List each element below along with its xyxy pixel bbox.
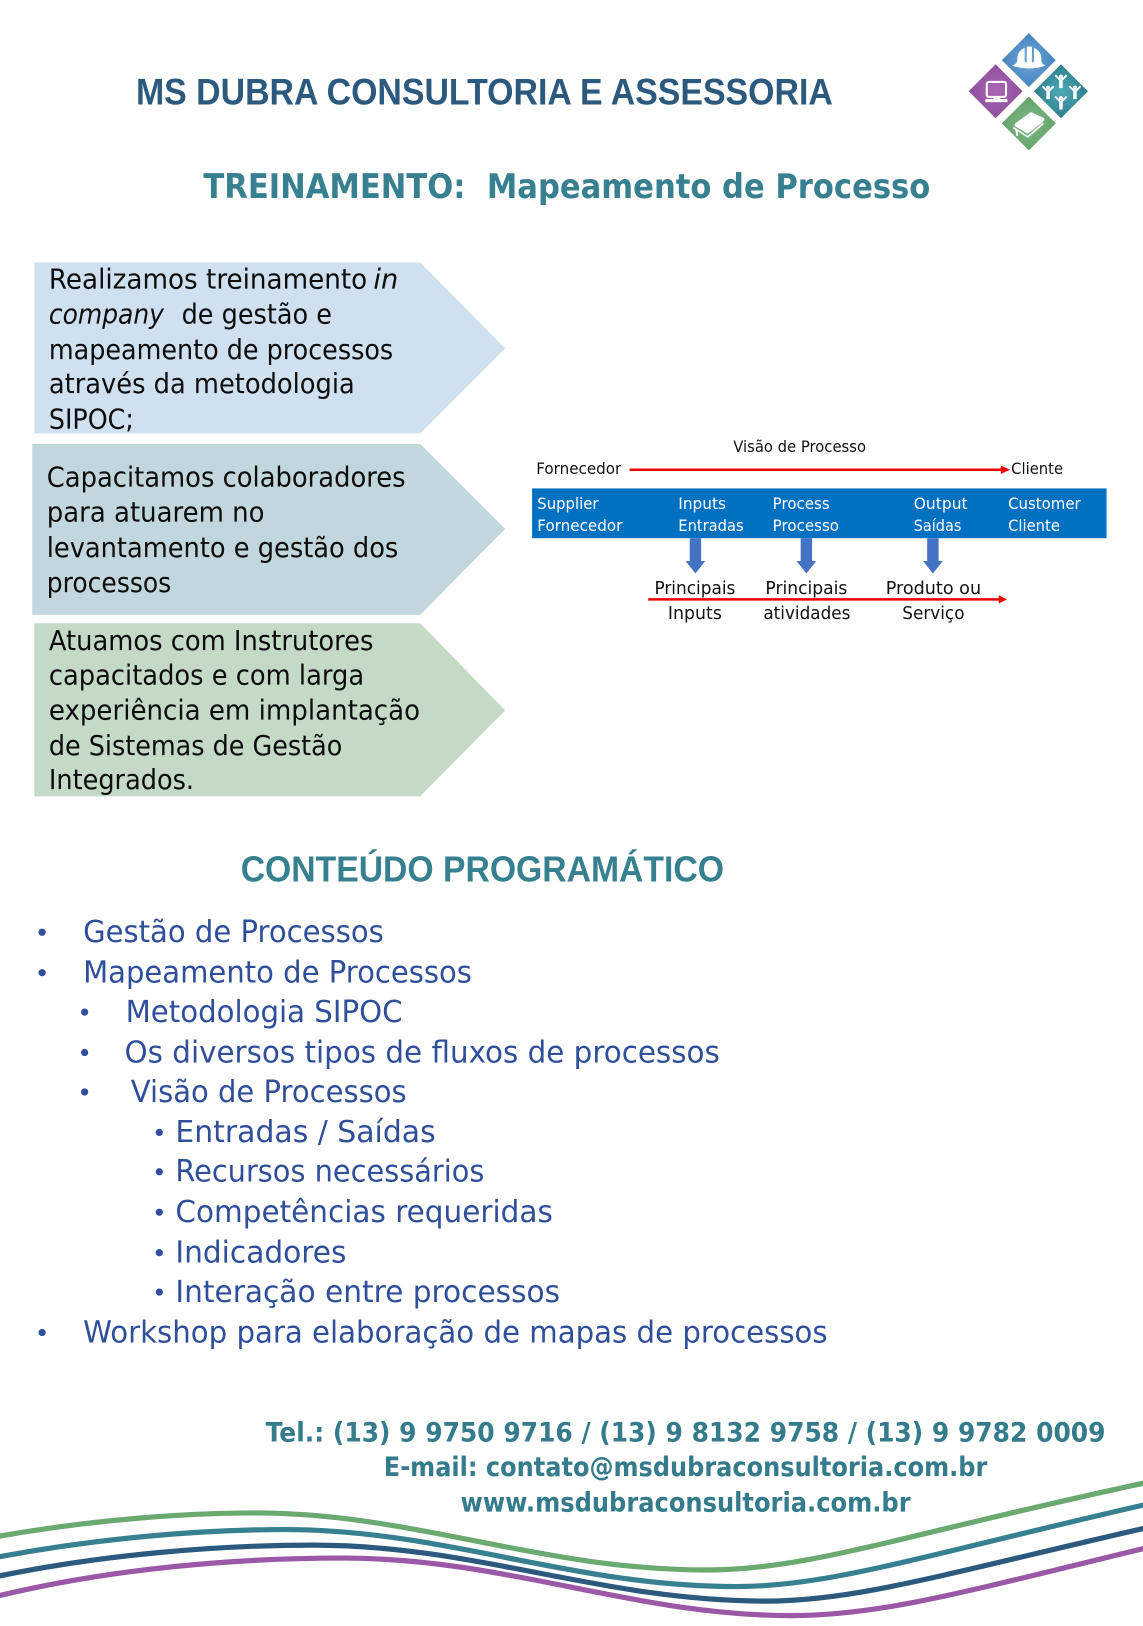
program content list: Workshop para elaboração de mapas de processos <box>83 1315 828 1350</box>
panel: in company training: SIPOC; <box>49 403 134 435</box>
panel: instructors: capacitados e com larga <box>49 659 364 691</box>
SIPOC diagram <box>532 437 1107 624</box>
label: product or service: Produto ou <box>886 579 981 599</box>
panel: in company training: mapeamento de processos <box>49 334 393 366</box>
panel: in company training: company <box>49 299 165 331</box>
label: main activities: Principais <box>765 579 847 599</box>
label: supplier: Fornecedor <box>536 459 622 478</box>
blue SIPOC bar: Inputs <box>678 494 726 513</box>
contact information <box>266 1417 1106 1518</box>
blue SIPOC bar: Output <box>914 494 968 513</box>
arrow: process view <box>630 466 1010 474</box>
blue SIPOC bar: Saídas <box>914 516 961 535</box>
blue SIPOC bar: Process <box>773 494 830 513</box>
blue SIPOC bar: Customer <box>1008 494 1081 513</box>
contact information: E-mail: contato@msdubraconsultoria.com.br <box>384 1452 988 1483</box>
panel: in company training: in <box>373 263 398 295</box>
program content list <box>38 915 828 1350</box>
blue SIPOC bar: Fornecedor <box>537 516 623 535</box>
blue SIPOC bar: Entradas <box>678 516 744 535</box>
panel: instructors: Integrados. <box>49 764 194 796</box>
label: product or service: Serviço <box>902 604 965 624</box>
diagram heading: Visão de Processo <box>733 437 866 456</box>
blue SIPOC bar <box>532 488 1107 538</box>
program content list: Entradas / Saídas <box>175 1115 436 1150</box>
subtitle: TREINAMENTO: Mapeamento de Processo <box>203 167 930 207</box>
arrow: lower process line <box>648 595 1007 604</box>
contact information: www.msdubraconsultoria.com.br <box>461 1487 911 1518</box>
panel: instructors: experiência em implantação <box>49 695 420 727</box>
panel: in company training: através da metodologia <box>49 368 355 400</box>
panel: training staff: para atuarem no <box>47 497 265 529</box>
program content list: Indicadores <box>175 1236 346 1271</box>
blue SIPOC bar: Supplier <box>537 494 599 513</box>
decorative waves <box>0 1483 1143 1616</box>
program content list: Gestão de Processos <box>83 915 384 950</box>
label: main inputs <box>654 579 735 624</box>
panel: instructors: de Sistemas de Gestão <box>49 730 342 762</box>
blue SIPOC bar: Processo <box>773 516 839 535</box>
icon: book <box>1002 96 1056 150</box>
program content list: Recursos necessários <box>175 1155 484 1190</box>
label: main activities: atividades <box>763 604 850 624</box>
panel: instructors: Atuamos com Instrutores <box>49 625 373 657</box>
program content list: Interação entre processos <box>175 1275 560 1310</box>
panel: training staff: levantamento e gestão dos <box>47 532 398 564</box>
program content list: Competências requeridas <box>175 1195 553 1230</box>
panel: training staff: Capacitamos colaboradores <box>47 461 406 493</box>
label: main inputs: Principais <box>654 579 735 599</box>
icon: computer monitor <box>969 64 1023 118</box>
program content list: Metodologia SIPOC <box>126 995 402 1030</box>
label: product or service <box>886 579 981 624</box>
icon: group of people <box>1034 64 1088 118</box>
program content list: Os diversos tipos de fluxos de processos <box>125 1035 720 1070</box>
panel: training staff <box>32 444 505 615</box>
panel: in company training: de gestão e <box>182 299 332 331</box>
blue SIPOC bar: Cliente <box>1008 516 1060 535</box>
program content list: Mapeamento de Processos <box>83 956 472 991</box>
panel: in company training: Realizamos treinamento <box>49 263 367 295</box>
icon: hard hat <box>1002 33 1056 87</box>
arrows: down to outputs <box>686 538 943 573</box>
panel: instructors <box>34 623 505 796</box>
title: MS DUBRA CONSULTORIA E ASSESSORIA <box>136 71 833 113</box>
label: client: Cliente <box>1011 459 1063 478</box>
logo <box>969 33 1088 150</box>
program content list: Visão de Processos <box>131 1075 407 1110</box>
panel: training staff: processos <box>47 567 171 599</box>
label: main inputs: Inputs <box>668 604 722 624</box>
label: main activities <box>763 579 850 624</box>
heading: program content: CONTEÚDO PROGRAMÁTICO <box>241 847 724 889</box>
panel: in company training <box>34 262 505 435</box>
